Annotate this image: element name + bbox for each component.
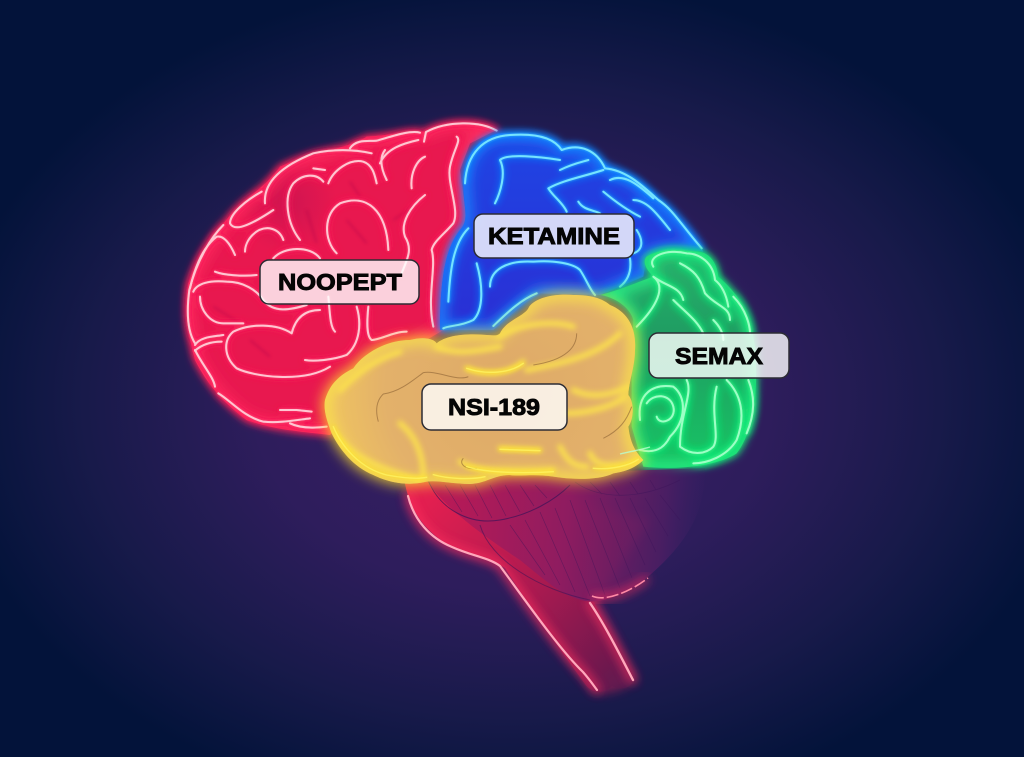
label: SEMAX: [649, 333, 789, 378]
creases: temporal lobe: [377, 333, 632, 469]
dark creases: frontal lobe: [213, 182, 413, 357]
neon line: cerebellum lower rim: [592, 578, 648, 598]
label: NOOPEPT: NOOPEPT: [278, 269, 402, 295]
label: SEMAX: SEMAX: [675, 343, 764, 369]
glow: cerebellum lower rim: [592, 578, 648, 598]
brain illustration: [187, 123, 756, 693]
label: NOOPEPT: [260, 260, 419, 304]
neon detail: fine line between temporal and occipital: [620, 447, 650, 454]
neon line: stem back edge: [590, 603, 633, 680]
neon lines: temporal lobe: [333, 363, 638, 479]
glow: stem front edge: [408, 496, 597, 690]
label: NSI-189: NSI-189: [448, 394, 540, 420]
label: KETAMINE: [474, 214, 634, 258]
region: frontal lobe (red): [187, 123, 497, 435]
region: parietal lobe (blue): [440, 133, 703, 330]
neon lines: frontal lobe: [188, 123, 497, 428]
region: occipital lobe (green): [600, 250, 756, 468]
yellow rim and folds: [325, 295, 643, 484]
region: cerebellum: [425, 468, 705, 601]
neon lines: occipital lobe: [637, 252, 753, 463]
label: NSI-189: [422, 384, 567, 430]
region: temporal lobe (yellow): [325, 295, 643, 484]
neon line: stem front edge: [408, 496, 597, 690]
label: KETAMINE: KETAMINE: [488, 223, 620, 249]
region: brain stem: [404, 470, 650, 693]
glow: stem back edge: [590, 603, 633, 680]
neon lines: parietal lobe: [443, 135, 702, 328]
